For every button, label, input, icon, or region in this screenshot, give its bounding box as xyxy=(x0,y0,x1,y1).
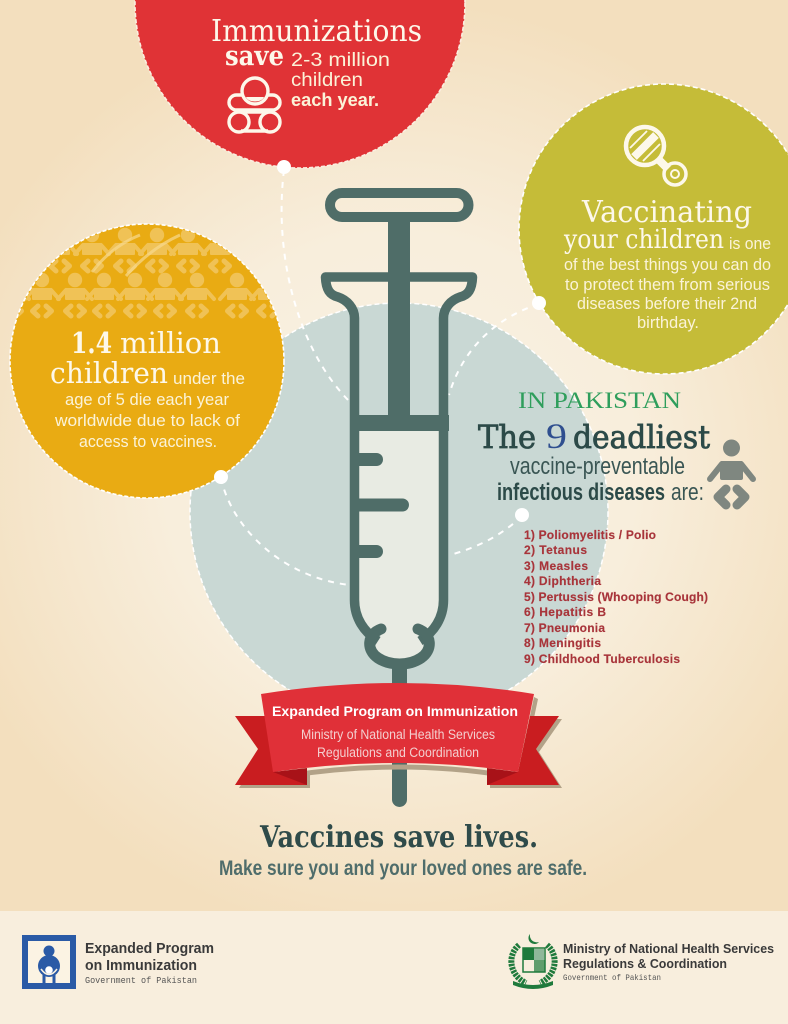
text: is one of the best things: diseases before their 2nd xyxy=(577,294,757,313)
footer text: expanded program: on Immunization xyxy=(85,958,197,974)
icon: rattle xyxy=(626,127,686,185)
heading: 1.4 million children: 1.4 xyxy=(71,326,112,360)
tick marks xyxy=(356,453,409,558)
bulb xyxy=(370,629,429,664)
list: nine diseases: 9) Childhood Tuberculosis xyxy=(524,652,680,666)
subheading: vaccine-preventable infectious diseases xyxy=(497,453,704,506)
logo: expanded program on immunization xyxy=(25,938,73,986)
plunger rod xyxy=(388,220,410,420)
syringe xyxy=(326,193,472,807)
footer text: expanded program xyxy=(85,941,214,986)
text: is one of the best things: of the best things you can do xyxy=(564,255,771,274)
ribbon tails xyxy=(235,716,559,785)
panel: 1.4 million children (orange circle) xyxy=(0,224,285,498)
subheading: make sure: Make sure you and your loved ones are safe. xyxy=(219,857,587,880)
footer text: expanded program: Expanded Program xyxy=(85,941,214,957)
plunger head xyxy=(350,415,449,431)
ribbon subtitle: Ministry of National Health Services xyxy=(301,727,495,742)
heading: 1.4 million children xyxy=(50,326,221,390)
heading: Vaccinating your children xyxy=(563,195,752,255)
text: under the age of 5: under the xyxy=(173,369,245,388)
list: nine diseases: 8) Meningitis xyxy=(524,636,601,650)
ribbon band xyxy=(261,683,534,772)
text: 2-3 million children each year: children xyxy=(291,70,363,91)
heading: save: save xyxy=(225,41,284,72)
ribbon subtitle: Regulations and Coordination xyxy=(317,745,479,760)
list: nine diseases: 4) Diphtheria xyxy=(524,574,601,588)
subheading: vaccine-preventable infectious diseases: infectious diseases xyxy=(497,479,665,506)
logo: national emblem xyxy=(511,934,555,989)
ribbon banner xyxy=(235,683,562,788)
heading: vaccines save lives: Vaccines save lives. xyxy=(259,820,538,855)
footer text: ministry: Government of Pakistan xyxy=(563,973,661,983)
text: 2-3 million children each year: each year. xyxy=(291,90,379,110)
dashed connector lines xyxy=(221,170,539,585)
text: under the age of 5 xyxy=(54,369,245,451)
list: nine diseases: 3) Measles xyxy=(524,559,588,573)
list: nine diseases: 7) Pneumonia xyxy=(524,621,605,635)
list: nine diseases: 5) Pertussis (Whooping Cough) xyxy=(524,590,708,604)
subheading: vaccine-preventable infectious diseases: vaccine-preventable xyxy=(510,453,685,480)
ribbon title: Expanded Program on Immunization xyxy=(272,704,518,719)
text: in Pakistan: IN PAKISTAN xyxy=(518,388,681,413)
text: under the age of 5: worldwide due to lack of xyxy=(54,411,240,430)
text: is one of the best things xyxy=(564,234,771,332)
heading: Vaccinating your children: Vaccinating xyxy=(581,195,752,230)
ribbon shadow xyxy=(238,697,562,788)
syringe liquid xyxy=(359,431,439,662)
list: nine diseases: 1) Poliomyelitis / Polio xyxy=(524,528,656,542)
footer text: expanded program: Government of Pakistan xyxy=(85,975,197,986)
baby pattern xyxy=(0,228,285,316)
text: 2-3 million children each year: 2-3 million xyxy=(291,50,390,71)
footer text: ministry: Regulations & Coordination xyxy=(563,957,727,971)
connector dots xyxy=(214,160,546,522)
subheading: vaccine-preventable infectious diseases: are: xyxy=(671,479,704,506)
ribbon subtitle xyxy=(301,727,495,760)
text: under the age of 5: access to vaccines. xyxy=(79,432,217,451)
text: is one of the best things: to protect them from serious xyxy=(565,275,770,294)
heading: the 9 deadliest: The xyxy=(478,418,536,456)
plunger handle xyxy=(330,193,468,217)
text: under the age of 5: age of 5 die each year xyxy=(65,390,229,409)
list: nine diseases: 6) Hepatitis B xyxy=(524,605,606,619)
icon: baby xyxy=(710,440,753,505)
list: nine diseases: 2) Tetanus xyxy=(524,543,587,557)
heading: the 9 deadliest: 9 xyxy=(546,416,567,456)
footer text: ministry xyxy=(563,942,774,983)
heading: the 9 deadliest: deadliest xyxy=(573,418,710,456)
panel: immunizations save (red circle) xyxy=(135,0,465,168)
text: 2-3 million children each year xyxy=(291,50,390,110)
heading: Vaccinating your children: your children xyxy=(563,225,724,255)
heading: 1.4 million children: million xyxy=(120,326,221,360)
footer band xyxy=(0,911,788,1024)
text: is one of the best things: birthday. xyxy=(637,313,699,332)
footer text: ministry: Ministry of National Health Services xyxy=(563,942,774,956)
list: nine diseases xyxy=(524,528,708,666)
text: is one of the best things: is one xyxy=(729,234,771,253)
panel: vaccinating your children (olive circle) xyxy=(519,84,788,374)
heading: the 9 deadliest xyxy=(478,416,710,456)
heading: 1.4 million children: children xyxy=(50,356,168,390)
needle xyxy=(392,660,407,807)
icon: seated baby xyxy=(229,78,280,132)
heading: Immunizations: Immunizations xyxy=(211,14,422,49)
pale blue background circle xyxy=(190,303,608,721)
ribbon folds xyxy=(273,768,518,785)
syringe barrel xyxy=(326,277,472,641)
